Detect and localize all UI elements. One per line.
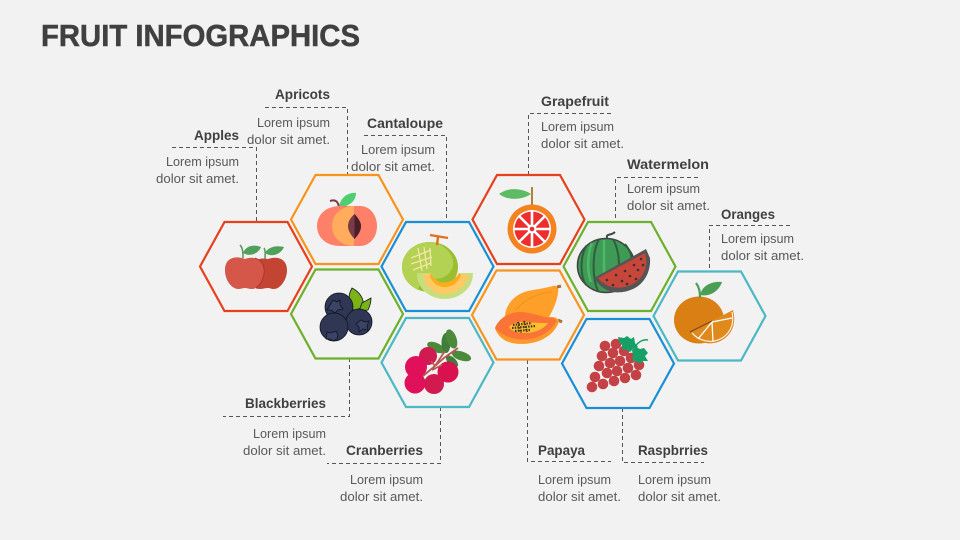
icon: cranberries	[404, 328, 472, 394]
label: cantaloupe: Cantaloupe	[367, 115, 443, 131]
label: blackberries: Lorem ipsum	[253, 427, 326, 441]
hexagon: apricots	[291, 175, 403, 264]
hexagon: raspberries	[562, 319, 674, 408]
label: apples	[156, 127, 239, 186]
label: grapefruit: dolor sit amet.	[541, 137, 624, 151]
label: raspberries: Raspbrries	[638, 442, 708, 458]
label: papaya: Papaya	[538, 442, 585, 458]
icon: oranges	[674, 282, 734, 344]
label: papaya: dolor sit amet.	[538, 490, 621, 504]
label: oranges	[721, 206, 804, 263]
panel: cantaloupe	[351, 115, 494, 311]
icon: blackberries	[320, 288, 372, 341]
label: papaya	[538, 442, 621, 504]
label: apricots: dolor sit amet.	[247, 133, 330, 147]
panel: cranberries	[327, 318, 494, 504]
label: blackberries: Blackberries	[245, 395, 326, 411]
hexagon: cranberries	[382, 318, 494, 407]
icon: cantaloupe	[402, 235, 473, 299]
panel: watermelon	[564, 156, 710, 311]
panel: oranges	[654, 206, 804, 360]
label: cranberries: dolor sit amet.	[340, 490, 423, 504]
label: watermelon	[627, 156, 710, 213]
panel: grapefruit	[472, 93, 624, 264]
label: papaya: Lorem ipsum	[538, 473, 611, 487]
label: apples: dolor sit amet.	[156, 172, 239, 186]
icon: watermelon	[578, 232, 650, 292]
label: apples: Lorem ipsum	[166, 155, 239, 169]
label: raspberries	[638, 442, 721, 504]
label: apricots: Apricots	[275, 86, 330, 102]
label: apricots	[247, 86, 330, 147]
label: cantaloupe: dolor sit amet.	[351, 160, 435, 174]
label: grapefruit	[541, 93, 624, 151]
hexagon: papaya	[472, 270, 584, 360]
label: watermelon: Lorem ipsum	[627, 182, 700, 196]
label: cranberries: Cranberries	[346, 442, 423, 458]
label: blackberries: dolor sit amet.	[243, 444, 326, 458]
icon: grapefruit	[499, 187, 556, 254]
icon: papaya	[495, 286, 562, 344]
title: FRUIT INFOGRAPHICS	[41, 18, 360, 53]
hexagon: oranges	[654, 272, 766, 360]
hexagon: apples	[200, 222, 312, 311]
label: oranges: dolor sit amet.	[721, 249, 804, 263]
label: cranberries: Lorem ipsum	[350, 473, 423, 487]
label: grapefruit: Lorem ipsum	[541, 120, 614, 134]
hexagon: blackberries	[291, 270, 403, 358]
label: watermelon: dolor sit amet.	[627, 199, 710, 213]
hexagon: cantaloupe	[382, 222, 494, 311]
label: oranges: Lorem ipsum	[721, 232, 794, 246]
label: watermelon: Watermelon	[627, 156, 709, 172]
hexagon: grapefruit	[472, 175, 584, 264]
label: apricots: Lorem ipsum	[257, 116, 330, 130]
panel: raspberries	[562, 319, 721, 504]
label: cantaloupe	[351, 115, 443, 174]
panel: blackberries	[223, 270, 403, 458]
panel: apples	[156, 127, 312, 311]
label: raspberries: Lorem ipsum	[638, 473, 711, 487]
label: apples: Apples	[194, 127, 239, 143]
icon: apples	[225, 245, 287, 289]
icon: apricots	[317, 193, 377, 246]
label: blackberries	[243, 395, 326, 458]
label: cantaloupe: Lorem ipsum	[361, 143, 435, 157]
icon: raspberries	[587, 336, 648, 392]
panel: apricots	[247, 86, 403, 264]
label: raspberries: dolor sit amet.	[638, 490, 721, 504]
hexagon: watermelon	[564, 222, 676, 311]
label: grapefruit: Grapefruit	[541, 93, 609, 109]
label: oranges: Oranges	[721, 206, 775, 222]
label: cranberries	[340, 442, 423, 504]
panel: papaya	[472, 270, 621, 504]
